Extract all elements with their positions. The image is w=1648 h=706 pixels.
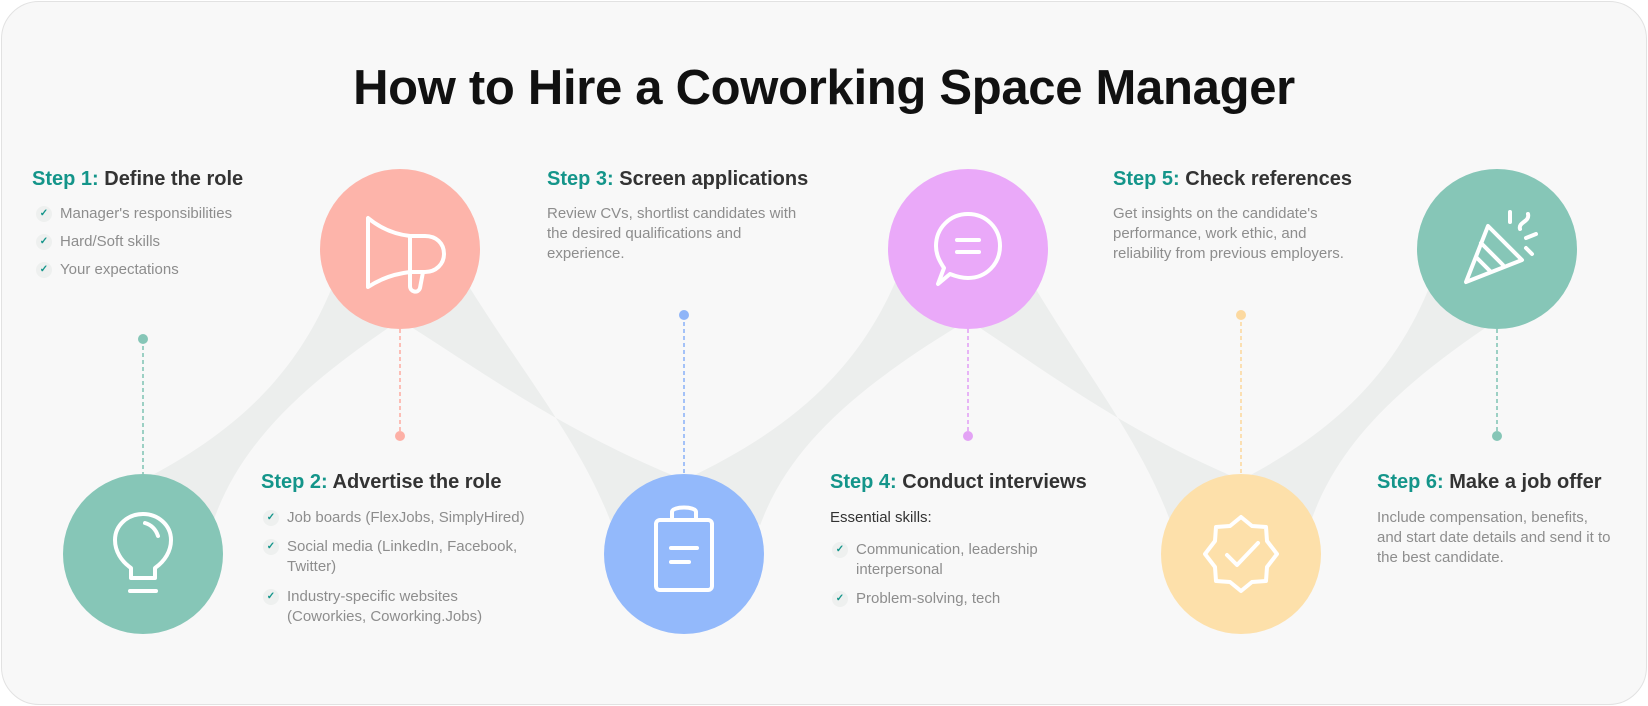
step 1 text: Your expectations bbox=[60, 261, 179, 278]
step 6 text: Step 6: Make a job offer bbox=[1377, 471, 1602, 493]
step 5 text: Step 5: Check references bbox=[1113, 168, 1352, 190]
step 3 text: Step 3: Screen applications bbox=[547, 168, 808, 190]
icon: party popper circle bbox=[1417, 169, 1577, 329]
step 2 text: (Coworkies, Coworking.Jobs) bbox=[287, 608, 482, 625]
step 2 text: Step 2: Advertise the role bbox=[261, 471, 501, 493]
step 5 text: Get insights on the candidate's bbox=[1113, 205, 1318, 222]
step 2 text: Social media (LinkedIn, Facebook, bbox=[287, 538, 517, 555]
step 4 text: Essential skills: bbox=[830, 509, 932, 526]
step 6 text bbox=[1377, 471, 1610, 566]
step 6 text: Include compensation, benefits, bbox=[1377, 509, 1588, 526]
step 5 text bbox=[1113, 168, 1352, 262]
step 4 text: Problem-solving, tech bbox=[856, 590, 1000, 607]
step 6 text: the best candidate. bbox=[1377, 549, 1504, 566]
icon: lightbulb circle bbox=[63, 474, 223, 634]
step 1 text bbox=[32, 168, 243, 278]
step 4 text: interpersonal bbox=[856, 561, 943, 578]
step 4 text: Communication, leadership bbox=[856, 541, 1038, 558]
step 2 text: Industry-specific websites bbox=[287, 588, 458, 605]
icon: chat bubble circle bbox=[888, 169, 1048, 329]
step 5 text: reliability from previous employers. bbox=[1113, 245, 1344, 262]
step 3 text: experience. bbox=[547, 245, 625, 262]
step 3 text: Review CVs, shortlist candidates with bbox=[547, 205, 796, 222]
step 2 text: Twitter) bbox=[287, 558, 336, 575]
icon: clipboard circle bbox=[604, 474, 764, 634]
step 1 text: Manager's responsibilities bbox=[60, 205, 232, 222]
step 5 text: performance, work ethic, and bbox=[1113, 225, 1306, 242]
step 3 text: the desired qualifications and bbox=[547, 225, 741, 242]
step 4 text bbox=[830, 471, 1087, 607]
icon: megaphone circle bbox=[320, 169, 480, 329]
step 2 text: Job boards (FlexJobs, SimplyHired) bbox=[287, 509, 525, 526]
step 2 text bbox=[261, 471, 525, 625]
step 4 text: Step 4: Conduct interviews bbox=[830, 471, 1087, 493]
step 6 text: and start date details and send it to bbox=[1377, 529, 1610, 546]
icon: badge check circle bbox=[1161, 474, 1321, 634]
step 1 text: Step 1: Define the role bbox=[32, 168, 243, 190]
title: How to Hire a Coworking Space Manager bbox=[353, 61, 1295, 115]
step 3 text bbox=[547, 168, 808, 262]
step 1 text: Hard/Soft skills bbox=[60, 233, 160, 250]
